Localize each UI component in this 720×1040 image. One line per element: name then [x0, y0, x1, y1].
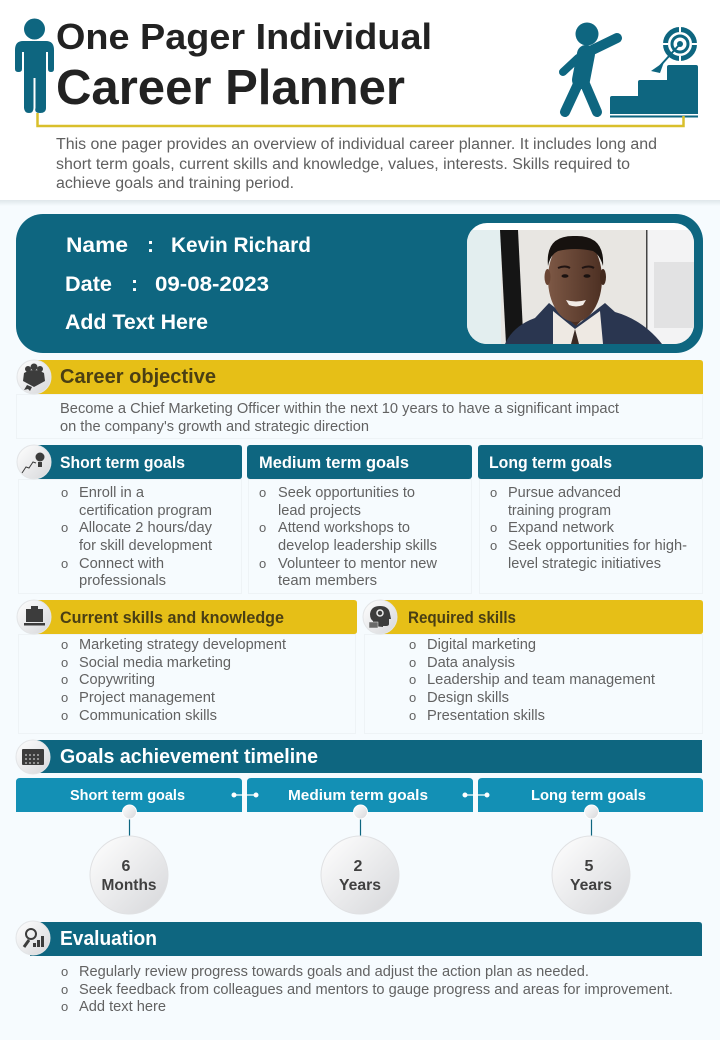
panel: current skills and knowledge: [17, 600, 357, 734]
list: Digital marketing: [427, 637, 536, 653]
list: Design skills: [427, 690, 509, 706]
list: Seek opportunities for high-: [508, 538, 687, 554]
panel: evaluation: [16, 921, 702, 1015]
heading: Required skills: [408, 609, 516, 627]
list: Add text here: [79, 999, 166, 1015]
list: Regularly review progress towards goals and adjust the action plan as needed.: [79, 964, 589, 980]
list: Social media marketing: [79, 655, 231, 671]
list: Leadership and team management: [427, 672, 655, 688]
heading: Evaluation: [60, 928, 157, 950]
list: o: [490, 538, 497, 553]
list: o: [409, 708, 416, 723]
profile details: Kevin Richard: [171, 234, 311, 257]
connector: short to medium: [232, 793, 258, 797]
list: lead projects: [278, 503, 361, 519]
list: o: [61, 690, 68, 705]
list: o: [61, 964, 68, 979]
milestone: 5 years: [552, 805, 630, 914]
list: Allocate 2 hours/day: [79, 520, 213, 536]
list: [490, 485, 687, 572]
list: o: [61, 672, 68, 687]
list: Presentation skills: [427, 708, 545, 724]
profile details: Date: [65, 273, 112, 296]
heading bar: [30, 360, 703, 394]
icon: head with gears: [363, 600, 397, 634]
list: Data analysis: [427, 655, 515, 671]
icon: standing person: [15, 18, 54, 113]
icon: laptop: [17, 600, 51, 634]
profile details: :: [147, 234, 154, 257]
list: Project management: [79, 690, 215, 706]
list: certification program: [79, 503, 212, 519]
heading: Current skills and knowledge: [60, 609, 284, 627]
list: Communication skills: [79, 708, 217, 724]
list: Volunteer to mentor new: [278, 556, 438, 572]
list: o: [490, 520, 497, 535]
profile details: Name: [66, 234, 128, 257]
icon: calendar: [16, 740, 50, 774]
objective text: on the company's growth and strategic direction: [60, 419, 369, 435]
description: short term goals, current skills and knowledge, values, interests. Skills required to: [56, 156, 630, 173]
icon: team badge: [17, 360, 51, 394]
list: o: [409, 637, 416, 652]
heading bar: [478, 445, 703, 479]
list: for skill development: [79, 538, 212, 554]
list: [61, 485, 213, 589]
list: Connect with: [79, 556, 164, 572]
list: o: [409, 672, 416, 687]
gold underline bracket: [38, 113, 684, 126]
heading bar: [247, 445, 472, 479]
description: [56, 136, 657, 192]
panel: goals achievement timeline: [16, 740, 703, 914]
milestone: 6 months: [90, 805, 168, 914]
list: o: [61, 556, 68, 571]
list: Seek opportunities to: [278, 485, 415, 501]
icon: magnifier over chart: [16, 921, 50, 955]
list: o: [61, 655, 68, 670]
profile details: :: [131, 273, 138, 296]
list: o: [409, 655, 416, 670]
milestone: 6 months: 6: [122, 858, 131, 875]
milestone: 2 years: Years: [339, 877, 381, 894]
timeline headers: Medium term goals: [288, 787, 428, 804]
profile details: Add Text Here: [65, 311, 208, 334]
timeline headers: [16, 778, 703, 812]
profile details: 09-08-2023: [155, 273, 269, 296]
description: achieve goals and training period.: [56, 175, 294, 192]
panel: medium term goals: [247, 445, 472, 594]
milestone: 2 years: [321, 805, 399, 914]
list: Seek feedback from colleagues and mentors to gauge progress and areas for improvement.: [79, 982, 673, 998]
icon: person climbing stairs to target: [563, 22, 698, 118]
list: o: [61, 637, 68, 652]
title: [56, 16, 432, 115]
list: [409, 637, 655, 724]
connector: medium to long: [463, 793, 489, 797]
list: o: [490, 485, 497, 500]
milestone: 5 years: 5: [585, 858, 594, 875]
milestone: 2 years: 2: [354, 858, 363, 875]
panel: long term goals: [478, 445, 703, 594]
milestone: 6 months: Months: [102, 877, 157, 894]
objective text: [60, 401, 619, 435]
panel: profile: [16, 214, 703, 353]
timeline headers: Long term goals: [531, 787, 646, 804]
heading bar: [30, 600, 357, 634]
list: Pursue advanced: [508, 485, 621, 501]
heading bar: [30, 740, 702, 773]
heading bar: [380, 600, 703, 634]
title: One Pager Individual: [56, 16, 432, 57]
list: o: [61, 999, 68, 1014]
list: Marketing strategy development: [79, 637, 286, 653]
list: Copywriting: [79, 672, 155, 688]
list: Enroll in a: [79, 485, 145, 501]
list: o: [259, 520, 266, 535]
photo: Kevin Richard: [467, 223, 694, 344]
heading: Career objective: [60, 366, 216, 388]
list: [61, 637, 286, 724]
heading: Short term goals: [60, 454, 185, 472]
header: [15, 16, 698, 192]
list: develop leadership skills: [278, 538, 437, 554]
heading bar: [30, 922, 702, 956]
list: [61, 964, 673, 1015]
panel: required skills: [363, 600, 703, 734]
icon: growth bulb: [17, 445, 51, 479]
panel: short term goals: [17, 445, 242, 594]
list: o: [61, 982, 68, 997]
list: o: [409, 690, 416, 705]
list: o: [61, 520, 68, 535]
title: Career Planner: [56, 61, 405, 115]
list: o: [259, 485, 266, 500]
list: training program: [508, 503, 611, 519]
list: Attend workshops to: [278, 520, 410, 536]
list: team members: [278, 573, 377, 589]
heading: Long term goals: [489, 454, 612, 472]
list: professionals: [79, 573, 166, 589]
heading: Goals achievement timeline: [60, 746, 318, 768]
objective text: Become a Chief Marketing Officer within the next 10 years to have a significant impact: [60, 401, 619, 417]
list: o: [61, 485, 68, 500]
heading: Medium term goals: [259, 454, 409, 472]
milestone: 5 years: Years: [570, 877, 612, 894]
list: Expand network: [508, 520, 615, 536]
list: [259, 485, 438, 589]
heading bar: [30, 445, 242, 479]
list: o: [259, 556, 266, 571]
panel: career objective: [16, 360, 703, 438]
list: o: [61, 708, 68, 723]
description: This one pager provides an overview of individual career planner. It includes long and: [56, 136, 657, 153]
timeline headers: Short term goals: [70, 787, 185, 804]
profile details: [65, 234, 311, 334]
list: level strategic initiatives: [508, 556, 661, 572]
